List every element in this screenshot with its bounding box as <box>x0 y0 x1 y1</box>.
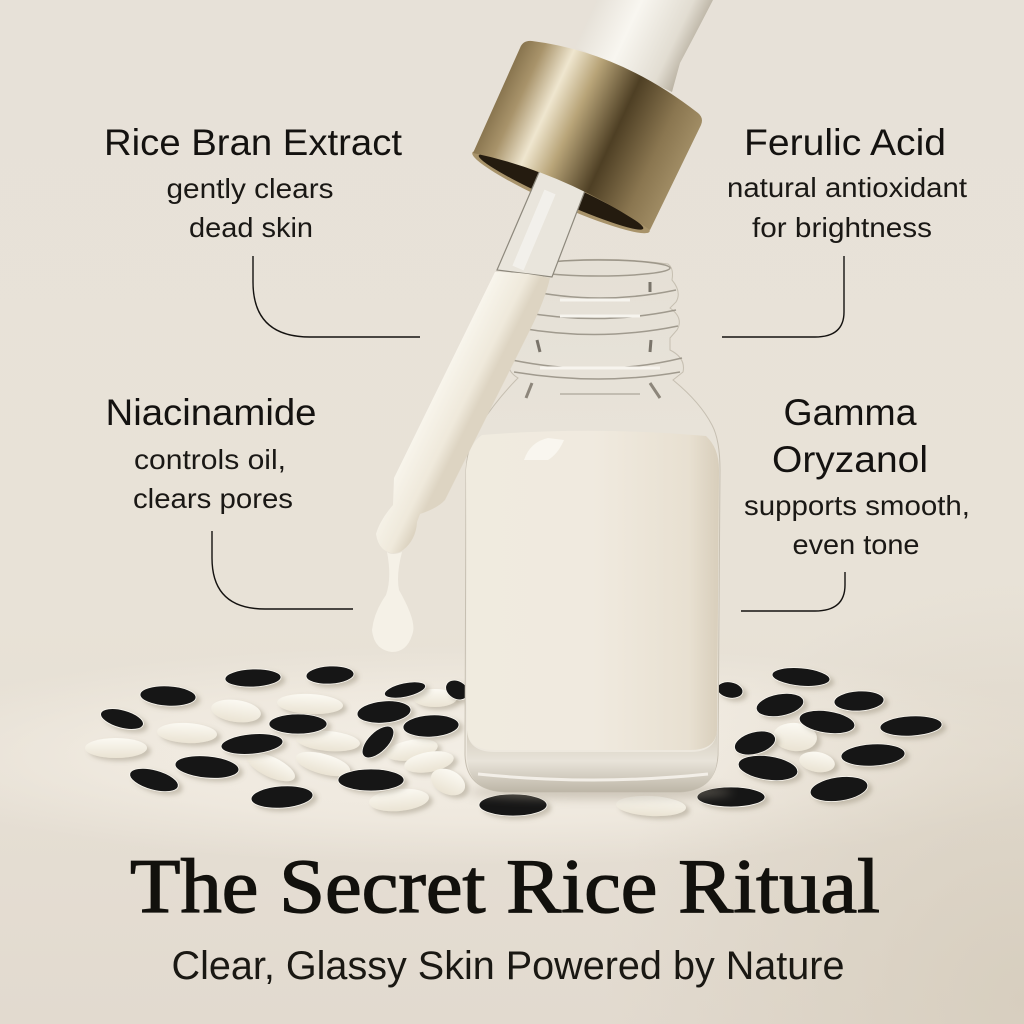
collar opening <box>467 141 655 243</box>
callout: Ferulic Acid: for brightness <box>752 212 932 243</box>
callout: Niacinamide: clears pores <box>133 483 293 514</box>
callout: Rice Bran Extract: Rice Bran Extract <box>104 122 403 163</box>
callout: Niacinamide: controls oil, <box>134 444 286 475</box>
dropper <box>372 0 713 652</box>
callout: Niacinamide <box>106 392 353 609</box>
callout: Ferulic Acid <box>722 122 967 337</box>
callout: Gamma Oryzanol: Oryzanol <box>772 439 928 480</box>
callout: Rice Bran Extract <box>104 122 420 337</box>
callout: Gamma Oryzanol <box>741 392 970 611</box>
bottle neck threads <box>512 260 682 398</box>
serum liquid <box>466 431 719 750</box>
callout: Gamma Oryzanol: Gamma <box>784 392 917 433</box>
callout: Gamma Oryzanol: even tone <box>792 529 920 560</box>
drop <box>372 552 413 652</box>
callout: Rice Bran Extract: dead skin <box>189 212 313 243</box>
glass pipette upper <box>497 170 586 277</box>
liquid highlight <box>524 438 564 460</box>
white rubber bulb <box>575 0 713 92</box>
bottle base glass <box>467 730 717 792</box>
callout: Ferulic Acid: natural antioxidant <box>727 172 967 203</box>
white liquid in pipette <box>376 272 550 553</box>
glass bottle with serum <box>465 259 732 799</box>
callout: Ferulic Acid: Ferulic Acid <box>744 122 946 163</box>
callout: Rice Bran Extract: gently clears <box>166 173 334 204</box>
subtitle: Clear, Glassy Skin Powered by Nature <box>172 944 844 988</box>
gold collar <box>473 41 702 230</box>
bottle glass body <box>465 259 720 792</box>
rice grains behind bottle <box>85 665 942 818</box>
callout: Gamma Oryzanol: supports smooth, <box>744 490 970 521</box>
callout: Niacinamide: Niacinamide <box>106 392 316 433</box>
title: The Secret Rice Ritual <box>130 843 880 929</box>
